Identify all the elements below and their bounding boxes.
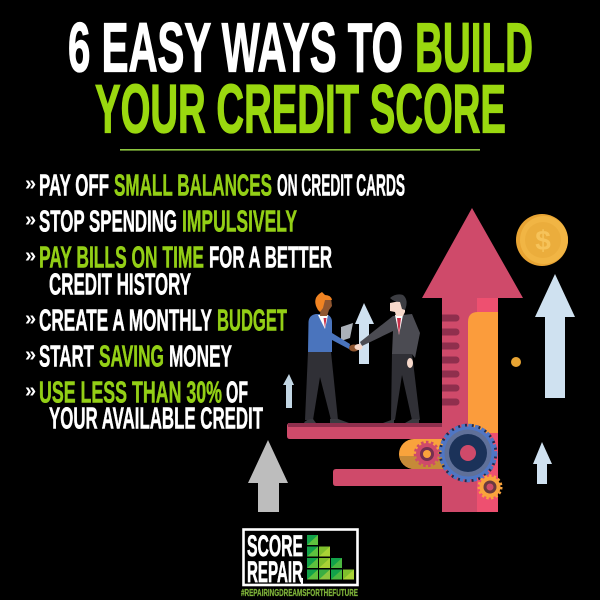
bullet 3: FOR A BETTER [209, 240, 332, 274]
bullet 2: IMPULSIVELY [182, 204, 297, 238]
bullet 4: CREATE A MONTHLY [39, 304, 212, 338]
icon: gold dollar coin: $ [535, 225, 551, 256]
small pink gear [416, 442, 438, 466]
figure: man in grey suit [354, 294, 420, 423]
bullet 3: CREDIT HISTORY [49, 268, 191, 302]
bullet 5: » [25, 344, 36, 366]
arrow: tiny pale blue left [283, 374, 294, 408]
big red arrow [422, 208, 523, 512]
logo wordmark: REPAIR [247, 556, 303, 589]
text: ON CREDIT CARDS [277, 168, 405, 202]
bullet 6: USE LESS THAN 30% [39, 376, 222, 410]
bullet 2: » [25, 209, 36, 231]
icon: gold dollar coin [516, 214, 568, 266]
bullet 5: SAVING [99, 340, 164, 374]
bullet list [25, 168, 405, 436]
logo hashtag: #REPAIRINGDREAMSFORTHEFUTURE [241, 588, 358, 599]
logo wordmark: SCORE [247, 530, 303, 563]
bullet 6: YOUR AVAILABLE CREDIT [49, 402, 263, 436]
bullet 6: » [25, 380, 36, 402]
bullet 6: OF [226, 376, 248, 410]
figure: man in blue sweater [304, 292, 359, 423]
logo: Score Repair [241, 530, 358, 599]
bullet 4: BUDGET [217, 304, 287, 338]
bullet 5: START [39, 340, 94, 374]
bullet 1: » [25, 173, 36, 195]
dot [511, 357, 521, 367]
logo staircase squares [307, 535, 354, 580]
lower platform [333, 469, 446, 486]
bullet 5 [25, 340, 232, 374]
bullet 3: PAY BILLS ON TIME [39, 240, 204, 274]
arrow: pale blue behind people [355, 303, 374, 364]
logo wordmark [247, 530, 303, 589]
bullet 1: PAY OFF [39, 168, 109, 202]
bullet 5: MONEY [169, 340, 232, 374]
bullet 6 [25, 376, 263, 436]
title [68, 8, 533, 148]
orange capsule [399, 439, 444, 469]
arrow: small pale blue lower right [533, 442, 552, 484]
bullet 3: » [25, 245, 36, 267]
bullet 3 [25, 240, 332, 302]
bullet 2: STOP SPENDING [39, 204, 177, 238]
bullet 1: SMALL BALANCES [114, 168, 272, 202]
arrow: grey [248, 440, 288, 512]
big blue gear [439, 424, 497, 482]
illustration: growth arrow machine [287, 208, 523, 512]
bullet 4: » [25, 308, 36, 330]
arrow ribs [442, 314, 460, 406]
logo frame [244, 530, 358, 585]
arrow: large pale blue [535, 274, 575, 398]
small orange gear [479, 476, 501, 498]
upper platform [287, 423, 442, 439]
